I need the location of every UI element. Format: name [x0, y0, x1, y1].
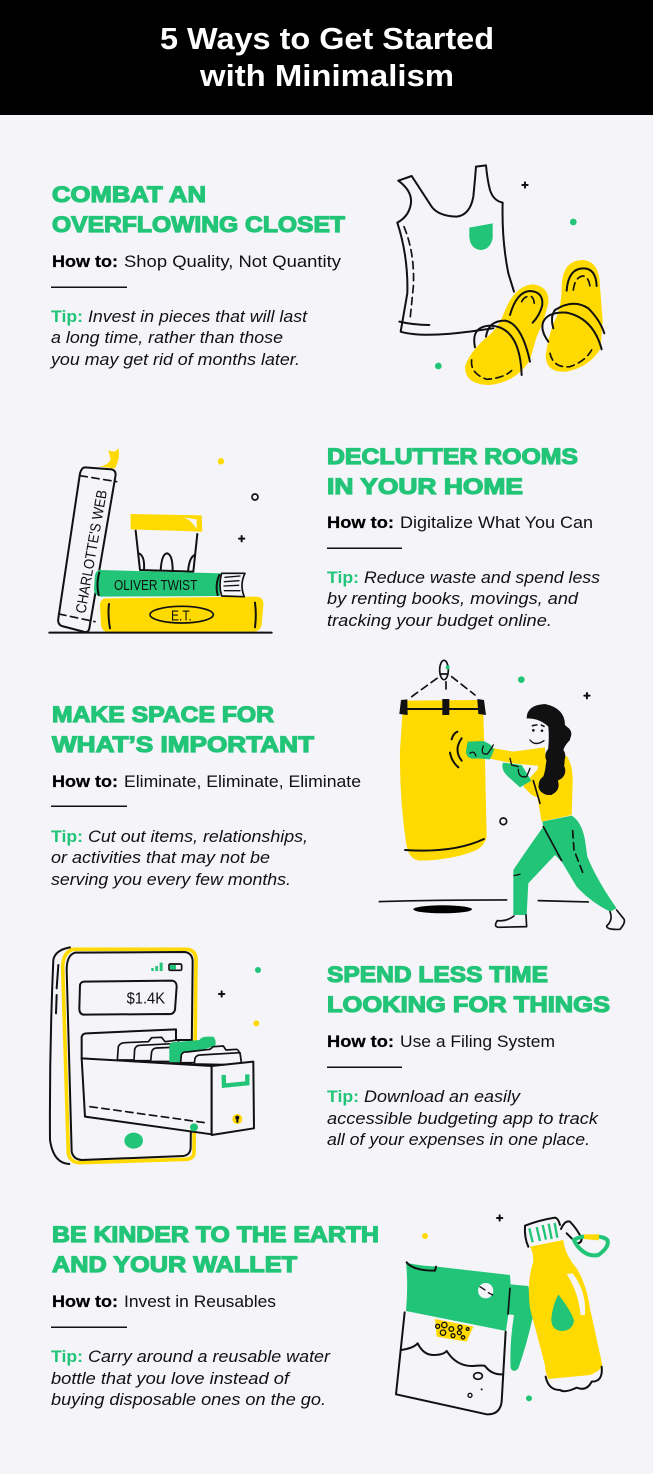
panel: filing text: SPEND LESS TIME [327, 962, 548, 987]
panel: reusables text: Tip: [51, 1347, 83, 1366]
panel: reusables text: AND YOUR WALLET [52, 1252, 298, 1277]
panel: reusables text: Carry around a reusable water [88, 1347, 331, 1366]
panel: space text: or activities that may not be [51, 848, 270, 867]
panel: filing text [327, 962, 610, 1149]
panel: space text: Cut out items, relationships, [88, 827, 308, 846]
panel: reusables text: How to: [52, 1292, 118, 1311]
panel: filing text: How to: [327, 1032, 394, 1051]
panel: filing text: Download an easily [364, 1087, 522, 1106]
title banner: with Minimalism [199, 58, 454, 93]
panel: filing text: LOOKING FOR THINGS [327, 992, 610, 1017]
panel: declutter text: DECLUTTER ROOMS [327, 444, 578, 469]
panel: space text: serving you every few months. [51, 870, 291, 889]
icon: stacked books: OLIVER TWIST [114, 578, 197, 594]
panel: reusables text: BE KINDER TO THE EARTH [52, 1222, 379, 1247]
panel: closet text: a long time, rather than those [51, 328, 283, 347]
panel: reusables text: bottle that you love instead of [51, 1369, 291, 1388]
panel: closet text: Shop Quality, Not Quantity [124, 252, 342, 271]
panel: space text: Eliminate, Eliminate, Eliminate [124, 772, 361, 791]
panel: filing text: all of your expenses in one place. [327, 1130, 590, 1149]
panel: declutter text: IN YOUR HOME [327, 474, 523, 499]
panel: declutter text: Tip: [327, 568, 359, 587]
icon: tank top and sandals [397, 165, 604, 385]
panel: filing text: accessible budgeting app to track [327, 1109, 600, 1128]
panel: closet text: you may get rid of months later. [50, 350, 300, 369]
icon: phone with file drawer [50, 947, 261, 1164]
panel: closet text: Tip: [51, 307, 83, 326]
icon: reusable jar and water bottle [396, 1215, 608, 1414]
panel: space text: WHAT’S IMPORTANT [52, 732, 315, 757]
icon: stacked books: CHARLOTTE'S WEB [74, 489, 111, 615]
title banner: 5 Ways to Get Started [160, 21, 494, 56]
panel: closet text [50, 182, 346, 369]
panel: declutter text [327, 444, 601, 630]
panel: closet text: Invest in pieces that will last [88, 307, 308, 326]
panel: space text: MAKE SPACE FOR [52, 702, 274, 727]
title banner [0, 0, 653, 115]
panel: reusables text: Invest in Reusables [124, 1292, 276, 1311]
panel: closet text: COMBAT AN [52, 182, 206, 207]
panel: space text: How to: [52, 772, 118, 791]
panel: space text [51, 702, 361, 889]
panel: declutter text: Reduce waste and spend less [364, 568, 601, 587]
icon: stacked books [49, 448, 272, 633]
panel: declutter text: by renting books, movings, and [327, 589, 579, 608]
panel: reusables text: buying disposable ones on the go. [51, 1390, 326, 1409]
panel: space text: Tip: [51, 827, 83, 846]
icon: phone with file drawer: $1.4K [127, 990, 165, 1007]
panel: closet text: OVERFLOWING CLOSET [52, 212, 346, 237]
icon: woman boxing a punching bag [379, 660, 624, 929]
panel: filing text: Tip: [327, 1087, 359, 1106]
panel: declutter text: Digitalize What You Can [400, 513, 593, 532]
panel: closet text: How to: [52, 252, 118, 271]
panel: declutter text: How to: [327, 513, 394, 532]
panel: reusables text [51, 1222, 379, 1409]
icon: stacked books: E.T. [171, 608, 192, 624]
panel: filing text: Use a Filing System [400, 1032, 555, 1051]
panel: declutter text: tracking your budget online. [327, 611, 552, 630]
